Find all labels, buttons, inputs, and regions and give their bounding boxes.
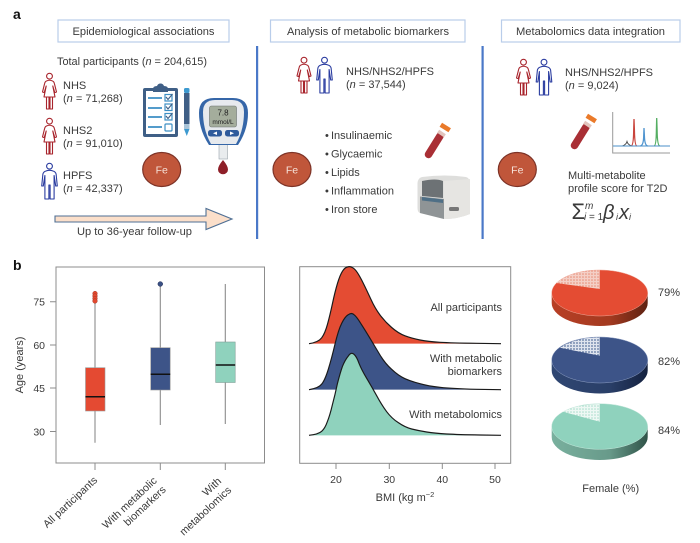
- icon: iron Fe: Fe: [511, 164, 524, 176]
- density: with metabolic biomarkers: [309, 313, 501, 390]
- icon: glucose meter: 7.8: [217, 108, 229, 118]
- biomarker list: Glycaemic: [331, 148, 383, 160]
- label 84%: 84%: [658, 425, 680, 437]
- chart: age box plot: [14, 267, 264, 538]
- formula: i: [616, 212, 619, 222]
- icon: man HPFS: [42, 163, 57, 199]
- text: HPFS: (n = 42,337): [63, 183, 123, 195]
- x axis tick labels: [330, 474, 501, 486]
- text: NHS: (n = 71,268): [63, 93, 123, 105]
- panel: epidemiological associations: [42, 20, 248, 238]
- y axis title: Age (years): [14, 337, 26, 393]
- x axis labels: With: [200, 475, 224, 499]
- y axis tick labels: 30: [33, 426, 45, 438]
- x axis tick labels: 40: [436, 474, 448, 486]
- chart: BMI ridgeline density: [300, 267, 511, 504]
- text: cohort size: NHS/NHS2/HPFS: [346, 66, 434, 78]
- text: NHS2: (n = 91,010): [63, 138, 123, 150]
- biomarker list: Inflammation: [331, 186, 394, 198]
- y axis tick labels: 45: [33, 383, 45, 395]
- text: cohort size: (n = 9,024): [565, 80, 619, 92]
- x axis labels: With metabolic: [100, 474, 160, 531]
- formula: [572, 199, 632, 224]
- follow-up label: Up to 36-year follow-up: [77, 226, 192, 238]
- biomarker list: •: [325, 186, 329, 198]
- icon: glucose meter: mmol/L: [212, 119, 234, 126]
- density curves: [309, 267, 501, 435]
- icon: iron Fe: [143, 152, 181, 186]
- heading: epidemiological associations: Epidemiological associations: [72, 26, 215, 38]
- y axis tick labels: [33, 296, 45, 438]
- icon: iron Fe: Fe: [156, 164, 168, 176]
- panel: metabolomics data integration: [498, 20, 680, 224]
- density: with metabolomics: [309, 353, 501, 435]
- biomarker list: •: [325, 148, 329, 160]
- arrow: follow-up: [55, 208, 232, 230]
- panel label a: a: [13, 6, 21, 22]
- x axis tick labels: 20: [330, 474, 342, 486]
- icon: iron Fe: Fe: [286, 164, 298, 176]
- panel label b: b: [13, 257, 22, 273]
- icon: man: [317, 57, 332, 93]
- icon: woman NHS: [42, 73, 56, 109]
- pie caption: Female (%): [582, 483, 639, 495]
- pie: with metabolomics: [552, 404, 648, 460]
- label 79%: 79%: [658, 287, 680, 299]
- formula: Σ: [572, 199, 585, 224]
- label 82%: 82%: [658, 356, 680, 368]
- y axis tick labels: 75: [33, 296, 45, 308]
- formula: i: [629, 212, 632, 222]
- icon: glucose meter: [199, 98, 248, 174]
- icon: woman NHS2: [42, 118, 56, 154]
- plot frame and axes: [50, 267, 264, 470]
- heading: epidemiological associations: [58, 20, 229, 42]
- text: multi-metabolite score: profile score for T2D: [568, 183, 668, 195]
- biomarker list: Insulinaemic: [331, 130, 393, 142]
- x axis labels: All participants: [41, 474, 100, 531]
- icon: man: [536, 59, 552, 95]
- x axis tick labels: 50: [489, 474, 501, 486]
- box: all participants: [86, 291, 105, 443]
- heading: analysis of metabolic biomarkers: Analysis of metabolic biomarkers: [287, 26, 449, 38]
- x axis title: −2: [426, 490, 434, 499]
- x axis tick labels: 30: [383, 474, 395, 486]
- x axis labels: [41, 474, 234, 538]
- text: cohort size: NHS/NHS2/HPFS: [565, 67, 653, 79]
- formula: β: [602, 202, 614, 224]
- x axis labels: metabolomics: [178, 484, 234, 538]
- heading: metabolomics data integration: [502, 20, 680, 42]
- panel: analysis of metabolic biomarkers: [270, 20, 470, 219]
- density labels: All participants: [430, 302, 502, 314]
- formula: i = 1: [584, 212, 604, 223]
- formula: x: [618, 202, 630, 224]
- density labels: [409, 302, 502, 421]
- icon: blood tube: [574, 116, 592, 146]
- chart: chromatogram: [613, 112, 670, 153]
- icon: clipboard and pencil: [143, 84, 190, 137]
- density: all participants: [309, 267, 501, 344]
- density labels: With metabolic: [430, 353, 502, 365]
- icon: woman: [516, 59, 530, 95]
- icon: blood tube: [428, 126, 446, 154]
- density labels: biomarkers: [448, 366, 502, 378]
- y axis tick labels: 60: [33, 340, 45, 352]
- text: NHS2: NHS2: [63, 125, 92, 137]
- icon: woman: [297, 57, 311, 93]
- icon: iron Fe: [273, 152, 311, 186]
- box: with metabolic biomarkers: [151, 282, 170, 425]
- text: cohort size: (n = 37,544): [346, 79, 406, 91]
- pie: all participants: [552, 270, 648, 326]
- plot frame and axis ticks: [300, 267, 511, 469]
- biomarker list: •: [325, 130, 329, 142]
- x axis labels: biomarkers: [122, 484, 169, 529]
- heading: metabolomics data integration: Metabolomics data integration: [516, 26, 665, 38]
- text: NHS: NHS: [63, 80, 86, 92]
- formula: m: [585, 201, 593, 212]
- pie: with metabolic biomarkers: [552, 337, 648, 394]
- box: with metabolomics: [216, 284, 235, 424]
- biomarker list: Lipids: [331, 167, 360, 179]
- icon: analyser machine: [418, 176, 470, 219]
- total participants text: Total participants (n = 204,615): [57, 56, 207, 68]
- icon: iron Fe: [498, 152, 536, 186]
- x axis title: BMI (kg m: [376, 492, 426, 504]
- biomarker list: •: [325, 204, 329, 216]
- density labels: With metabolomics: [409, 409, 502, 421]
- text: multi-metabolite score: Multi-metabolite: [568, 170, 646, 182]
- text: HPFS: HPFS: [63, 170, 92, 182]
- biomarker list: •: [325, 167, 329, 179]
- chart: female percentage pies: [552, 270, 680, 495]
- biomarker list: Iron store: [331, 204, 377, 216]
- heading: analysis of metabolic biomarkers: [270, 20, 465, 42]
